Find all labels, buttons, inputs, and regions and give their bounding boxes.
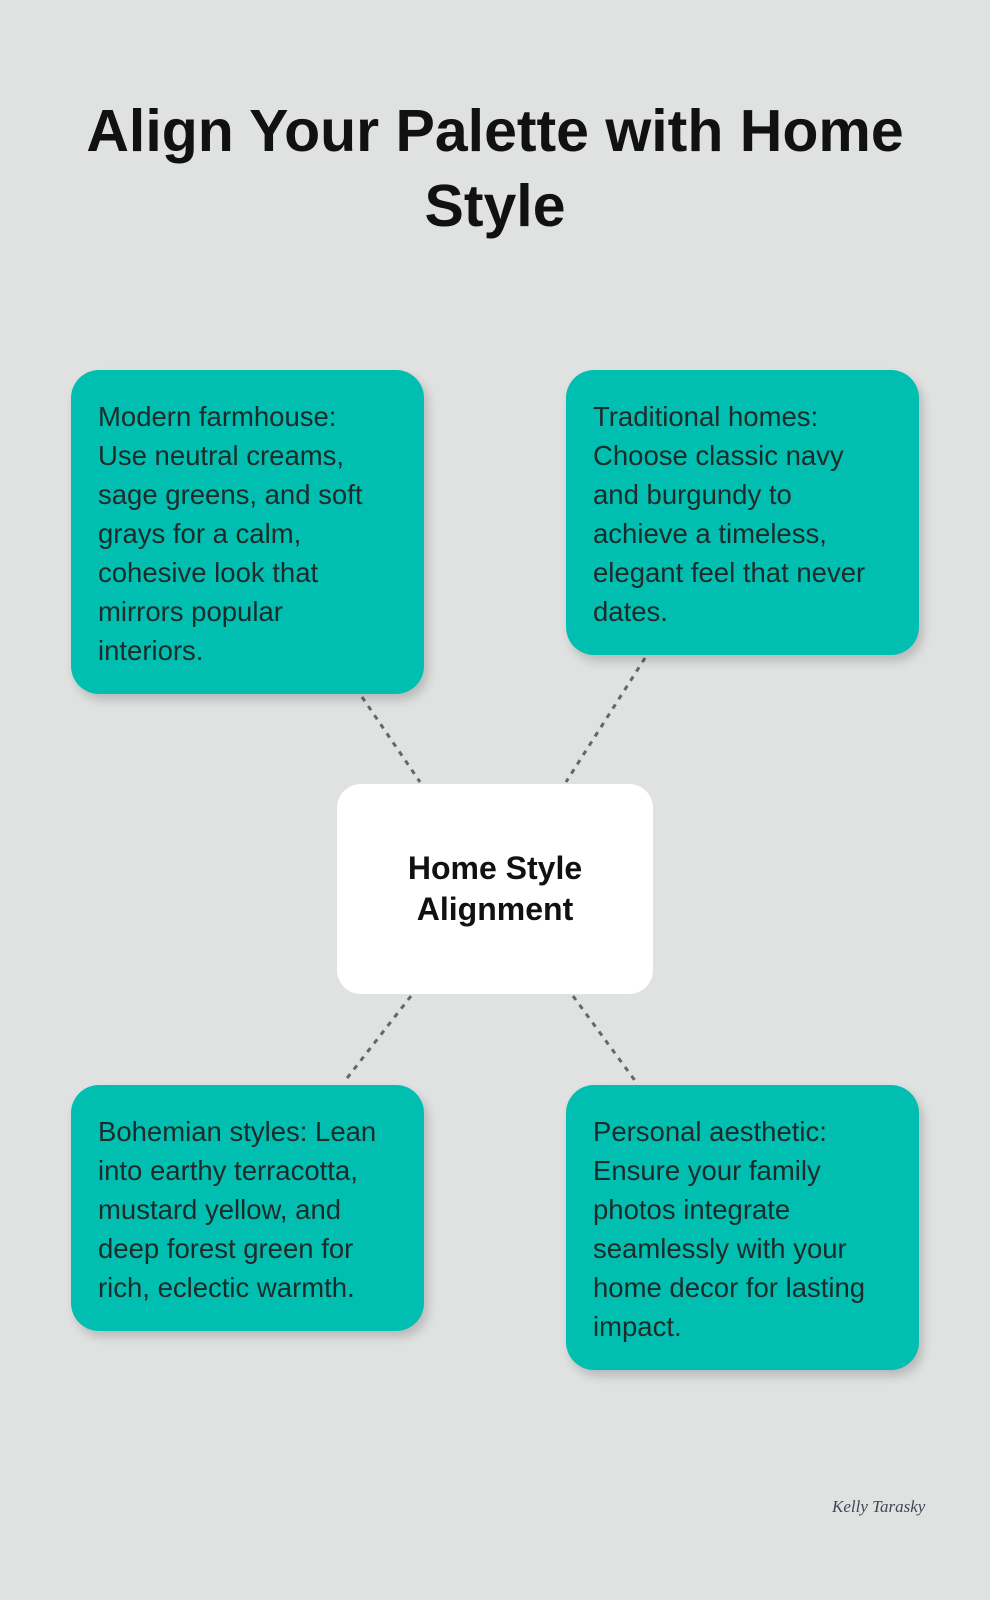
center node: Alignment — [417, 891, 573, 927]
signature logo: Kelly Tarasky — [832, 1497, 925, 1516]
panel: traditional homes: Traditional homes: — [593, 401, 818, 432]
center node: Home Style — [408, 850, 582, 886]
panel: personal aesthetic: Personal aesthetic: — [593, 1116, 827, 1147]
panel: modern farmhouse: grays for a calm, — [98, 518, 301, 549]
panel: modern farmhouse: interiors. — [98, 635, 203, 666]
panel: personal aesthetic: home decor for lasting — [593, 1272, 865, 1303]
panel: traditional homes: elegant feel that never — [593, 557, 865, 588]
title — [86, 98, 904, 239]
panel: traditional homes: achieve a timeless, — [593, 518, 827, 549]
panel: modern farmhouse: mirrors popular — [98, 596, 283, 627]
panel: personal aesthetic: impact. — [593, 1311, 682, 1342]
panel: bohemian — [71, 1085, 424, 1331]
panel: bohemian: deep forest green for — [98, 1233, 353, 1264]
title: Style — [424, 173, 566, 239]
panel: bohemian: Bohemian styles: Lean — [98, 1116, 376, 1147]
title: Align Your Palette with Home — [86, 98, 904, 164]
panel: bohemian: rich, eclectic warmth. — [98, 1272, 355, 1303]
panel: modern farmhouse: cohesive look that — [98, 557, 318, 588]
panel: bohemian: into earthy terracotta, — [98, 1155, 358, 1186]
panel: modern farmhouse: Modern farmhouse: — [98, 401, 336, 432]
panel: modern farmhouse: Use neutral creams, — [98, 440, 344, 471]
panel: personal aesthetic: seamlessly with your — [593, 1233, 847, 1264]
panel: personal aesthetic — [566, 1085, 919, 1370]
panel: traditional homes: dates. — [593, 596, 668, 627]
panel: modern farmhouse — [71, 370, 424, 694]
panel: traditional homes: and burgundy to — [593, 479, 792, 510]
panel: modern farmhouse: sage greens, and soft — [98, 479, 362, 510]
panel: traditional homes — [566, 370, 919, 655]
panel: bohemian: mustard yellow, and — [98, 1194, 341, 1225]
panel: personal aesthetic: photos integrate — [593, 1194, 790, 1225]
center node — [337, 784, 653, 994]
panel: traditional homes: Choose classic navy — [593, 440, 844, 471]
panel: personal aesthetic: Ensure your family — [593, 1155, 821, 1186]
